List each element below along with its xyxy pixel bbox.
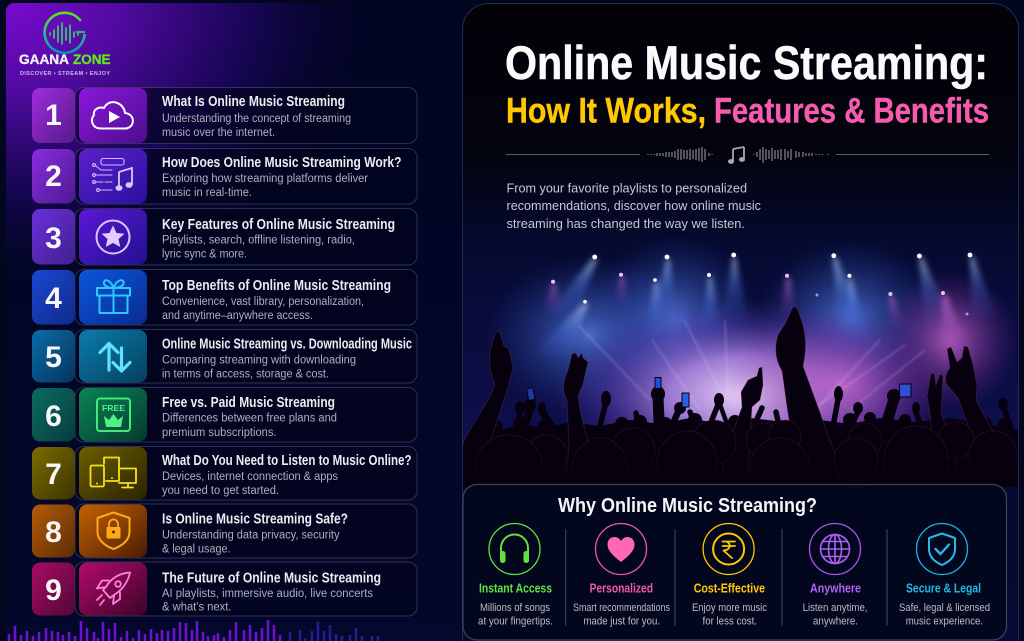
text: how does streaming work <box>162 155 402 199</box>
icon: gift box <box>79 270 147 324</box>
decorative equalizer bars <box>9 620 378 641</box>
intro paragraph: recommendations, discover how online music <box>506 198 761 213</box>
stage light beams <box>542 253 993 354</box>
benefit: personalized <box>573 524 670 628</box>
icon: cloud with play button <box>79 88 147 143</box>
text: free vs paid: Free vs. Paid Music Streaming <box>162 395 335 411</box>
icon: up and down arrows <box>79 330 147 382</box>
logo: Gaana Zone: ZONE <box>73 52 110 67</box>
text: is it safe: Understanding data privacy, security <box>162 529 340 541</box>
text: how does streaming work: music in real-time. <box>162 187 252 199</box>
panel: why online music streaming <box>463 484 1006 640</box>
text: the future <box>162 570 381 614</box>
text: what is online music streaming: Understanding the concept of streaming <box>162 113 351 125</box>
agenda row 5 <box>32 330 417 383</box>
intro paragraph <box>506 181 761 231</box>
other arms <box>720 367 763 490</box>
text: top benefits: Top Benefits of Online Music Streaming <box>162 278 391 294</box>
number badge 7 <box>32 447 75 500</box>
text: is it safe: & legal usage. <box>162 543 230 555</box>
benefit: secure and legal: Safe, legal & licensed <box>899 602 990 614</box>
number badge 6: 6 <box>45 400 62 433</box>
intro paragraph: streaming has changed the way we listen. <box>506 216 745 231</box>
text: free vs paid <box>162 395 337 439</box>
number badge 5: 5 <box>45 341 62 374</box>
text: what you need <box>162 453 412 497</box>
second raised arm <box>563 352 588 478</box>
text: what you need: you need to get started. <box>162 485 279 497</box>
number badge 1 <box>32 88 75 143</box>
benefit: anywhere: Anywhere <box>810 582 861 596</box>
agenda row 8 <box>32 504 417 558</box>
icon: rocket <box>79 562 147 616</box>
number badge 7: 7 <box>45 458 62 491</box>
number badge 9: 9 <box>45 574 62 607</box>
number badge 4: 4 <box>45 282 62 315</box>
icon: star in circle <box>79 209 147 264</box>
icon: rupee coin <box>713 534 744 564</box>
small raised arms <box>516 398 1014 430</box>
text: the future: & what's next. <box>162 602 232 614</box>
text: what is online music streaming: What Is Online Music Streaming <box>162 94 345 110</box>
number badge 8: 8 <box>45 516 62 549</box>
benefit: secure and legal: Secure & Legal <box>906 582 981 596</box>
text: the future: AI playlists, immersive audio, live concerts <box>162 588 373 600</box>
benefit: instant access: Millions of songs <box>480 602 550 614</box>
number badge 3 <box>32 209 75 264</box>
icon: shield with check <box>929 534 955 565</box>
intro paragraph: From your favorite playlists to personalized <box>506 181 747 196</box>
number badge 2 <box>32 149 75 204</box>
agenda row 1 <box>32 88 417 144</box>
text: what you need: Devices, internet connection & apps <box>162 471 338 483</box>
text: what is online music streaming: music over the internet. <box>162 127 275 139</box>
panel: right hero <box>455 4 1020 641</box>
text: key features: Playlists, search, offline listening, radio, <box>162 235 355 247</box>
panel: left agenda <box>6 3 476 641</box>
number badge 3: 3 <box>45 222 62 255</box>
title <box>505 36 989 131</box>
benefit: cost-effective: Cost-Effective <box>694 582 765 596</box>
agenda row 3 <box>32 208 417 265</box>
text: is it safe <box>162 512 348 555</box>
agenda row 2 <box>32 148 417 204</box>
number badge 6 <box>32 388 75 442</box>
icon: free crown badge: FREE <box>102 403 125 413</box>
icon: phone tablet and monitor <box>79 447 147 500</box>
number badge 2: 2 <box>45 160 62 193</box>
benefit: personalized: made just for you. <box>584 616 660 628</box>
text: how does streaming work: Exploring how streaming platforms deliver <box>162 173 368 185</box>
text: streaming vs downloading <box>162 336 412 381</box>
left raised arm <box>463 331 514 450</box>
logo: Gaana Zone: DISCOVER • STREAM • ENJOY <box>20 71 110 77</box>
logo: Gaana Zone <box>19 13 110 77</box>
agenda row 6 <box>32 388 417 442</box>
text: top benefits <box>162 278 391 322</box>
spotlight lamps <box>551 253 972 316</box>
text: streaming vs downloading: in terms of access, storage & cost. <box>162 369 329 381</box>
title: How It Works, <box>506 91 706 131</box>
small raised hands <box>515 386 1008 415</box>
benefit: personalized: Personalized <box>590 582 653 596</box>
agenda row 7 <box>32 446 417 500</box>
number badge 9 <box>32 562 75 616</box>
number badge 5 <box>32 330 75 382</box>
phones held up <box>526 378 911 407</box>
central raised arm <box>776 307 842 490</box>
benefit: instant access <box>478 524 553 628</box>
audience heads <box>476 420 1018 480</box>
number badge 1: 1 <box>45 99 62 132</box>
right raised arm <box>945 346 1018 480</box>
icon: headphones <box>500 534 529 563</box>
icon: globe <box>820 534 850 564</box>
column dividers <box>566 529 887 626</box>
agenda row 4 <box>32 270 417 325</box>
white laser rays <box>578 320 925 410</box>
logo: Gaana Zone: GAANA <box>19 52 69 67</box>
text: free vs paid: premium subscriptions. <box>162 427 276 439</box>
text: free vs paid: Differences between free plans and <box>162 413 337 425</box>
icon: playlist circuit and music note <box>79 149 147 204</box>
benefit: personalized: Smart recommendations <box>573 602 670 614</box>
text: key features <box>162 217 395 261</box>
icon: heart <box>608 537 634 562</box>
text: top benefits: and anytime–anywhere access. <box>162 310 313 322</box>
number badge 8 <box>32 504 75 558</box>
benefit: instant access: Instant Access <box>479 582 552 596</box>
text: key features: lyric sync & more. <box>162 249 247 261</box>
text: top benefits: Convenience, vast library, personalization, <box>162 296 364 308</box>
text: streaming vs downloading: Online Music Streaming vs. Downloading Music <box>162 336 412 352</box>
benefit: anywhere <box>803 524 868 628</box>
benefit: cost-effective <box>692 524 767 628</box>
icon: free crown badge <box>79 388 147 442</box>
benefit: cost-effective: for less cost. <box>702 616 757 628</box>
benefit: anywhere: anywhere. <box>813 616 858 628</box>
benefit: cost-effective: Enjoy more music <box>692 602 767 614</box>
text: how does streaming work: How Does Online Music Streaming Work? <box>162 155 402 171</box>
text: what is online music streaming <box>162 94 351 139</box>
text: key features: Key Features of Online Music Streaming <box>162 217 395 233</box>
concert crowd silhouettes <box>455 307 1018 502</box>
text: is it safe: Is Online Music Streaming Safe? <box>162 512 348 528</box>
divider with waveform and music note <box>506 147 989 164</box>
benefit: anywhere: Listen anytime, <box>803 602 868 614</box>
text: the future: The Future of Online Music Streaming <box>162 570 381 586</box>
agenda row 9 <box>32 562 417 616</box>
heading: Why Online Music Streaming? <box>558 495 817 517</box>
benefit: secure and legal: music experience. <box>906 616 983 628</box>
benefit: instant access: at your fingertips. <box>478 616 553 628</box>
concert photo illustration <box>455 235 1020 502</box>
icon: shield with padlock <box>79 504 147 558</box>
text: what you need: What Do You Need to Listen to Music Online? <box>162 453 412 469</box>
number badge 4 <box>32 270 75 324</box>
text: streaming vs downloading: Comparing streaming with downloading <box>162 355 356 367</box>
benefit: secure and legal <box>899 524 990 628</box>
